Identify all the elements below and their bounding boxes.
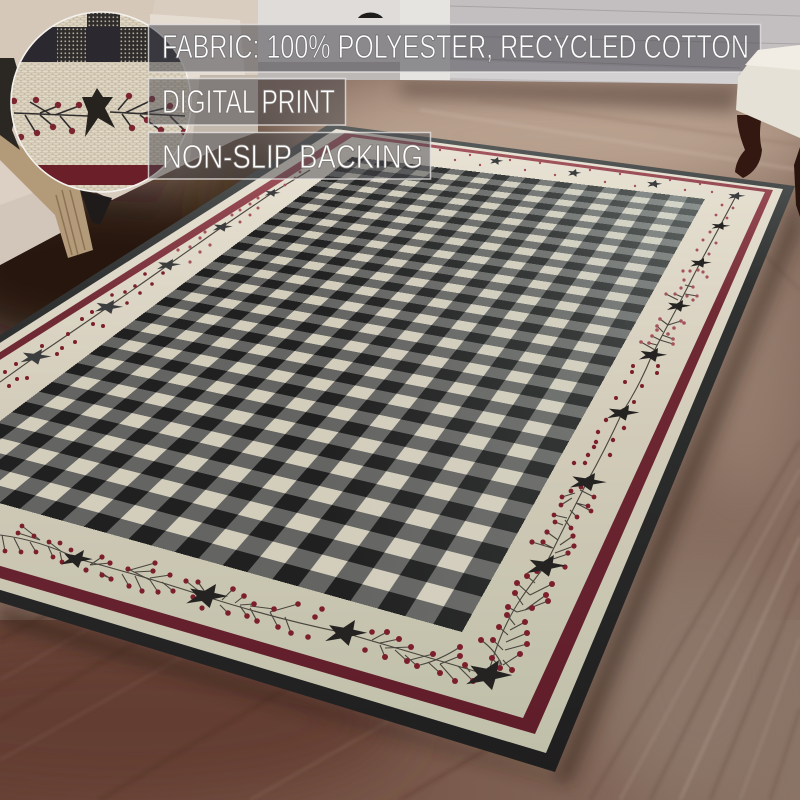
- rug shadow: [0, 190, 800, 785]
- rug inner cream border: [0, 137, 765, 718]
- label: digital print: DIGITAL PRINT: [162, 83, 335, 120]
- vine stems: [0, 170, 736, 681]
- wall: [250, 0, 800, 120]
- vine berries: near side: [3, 271, 660, 684]
- vine berries: far side: [176, 149, 734, 346]
- label: non-slip backing: NON-SLIP BACKING: [162, 138, 423, 175]
- white cabinet: [258, 0, 450, 80]
- label: digital print: [148, 78, 346, 125]
- far stars: [15, 156, 748, 365]
- rug outer cream band: [0, 129, 783, 753]
- vine stars: [55, 221, 733, 692]
- rug buffalo check field: [0, 157, 705, 632]
- sofa: [0, 0, 258, 265]
- label: non-slip backing: [148, 132, 430, 179]
- ottoman: [735, 45, 800, 217]
- rug red stripe: [0, 133, 773, 734]
- circular detail inset: [10, 10, 195, 195]
- throw blanket fringe: [0, 58, 112, 258]
